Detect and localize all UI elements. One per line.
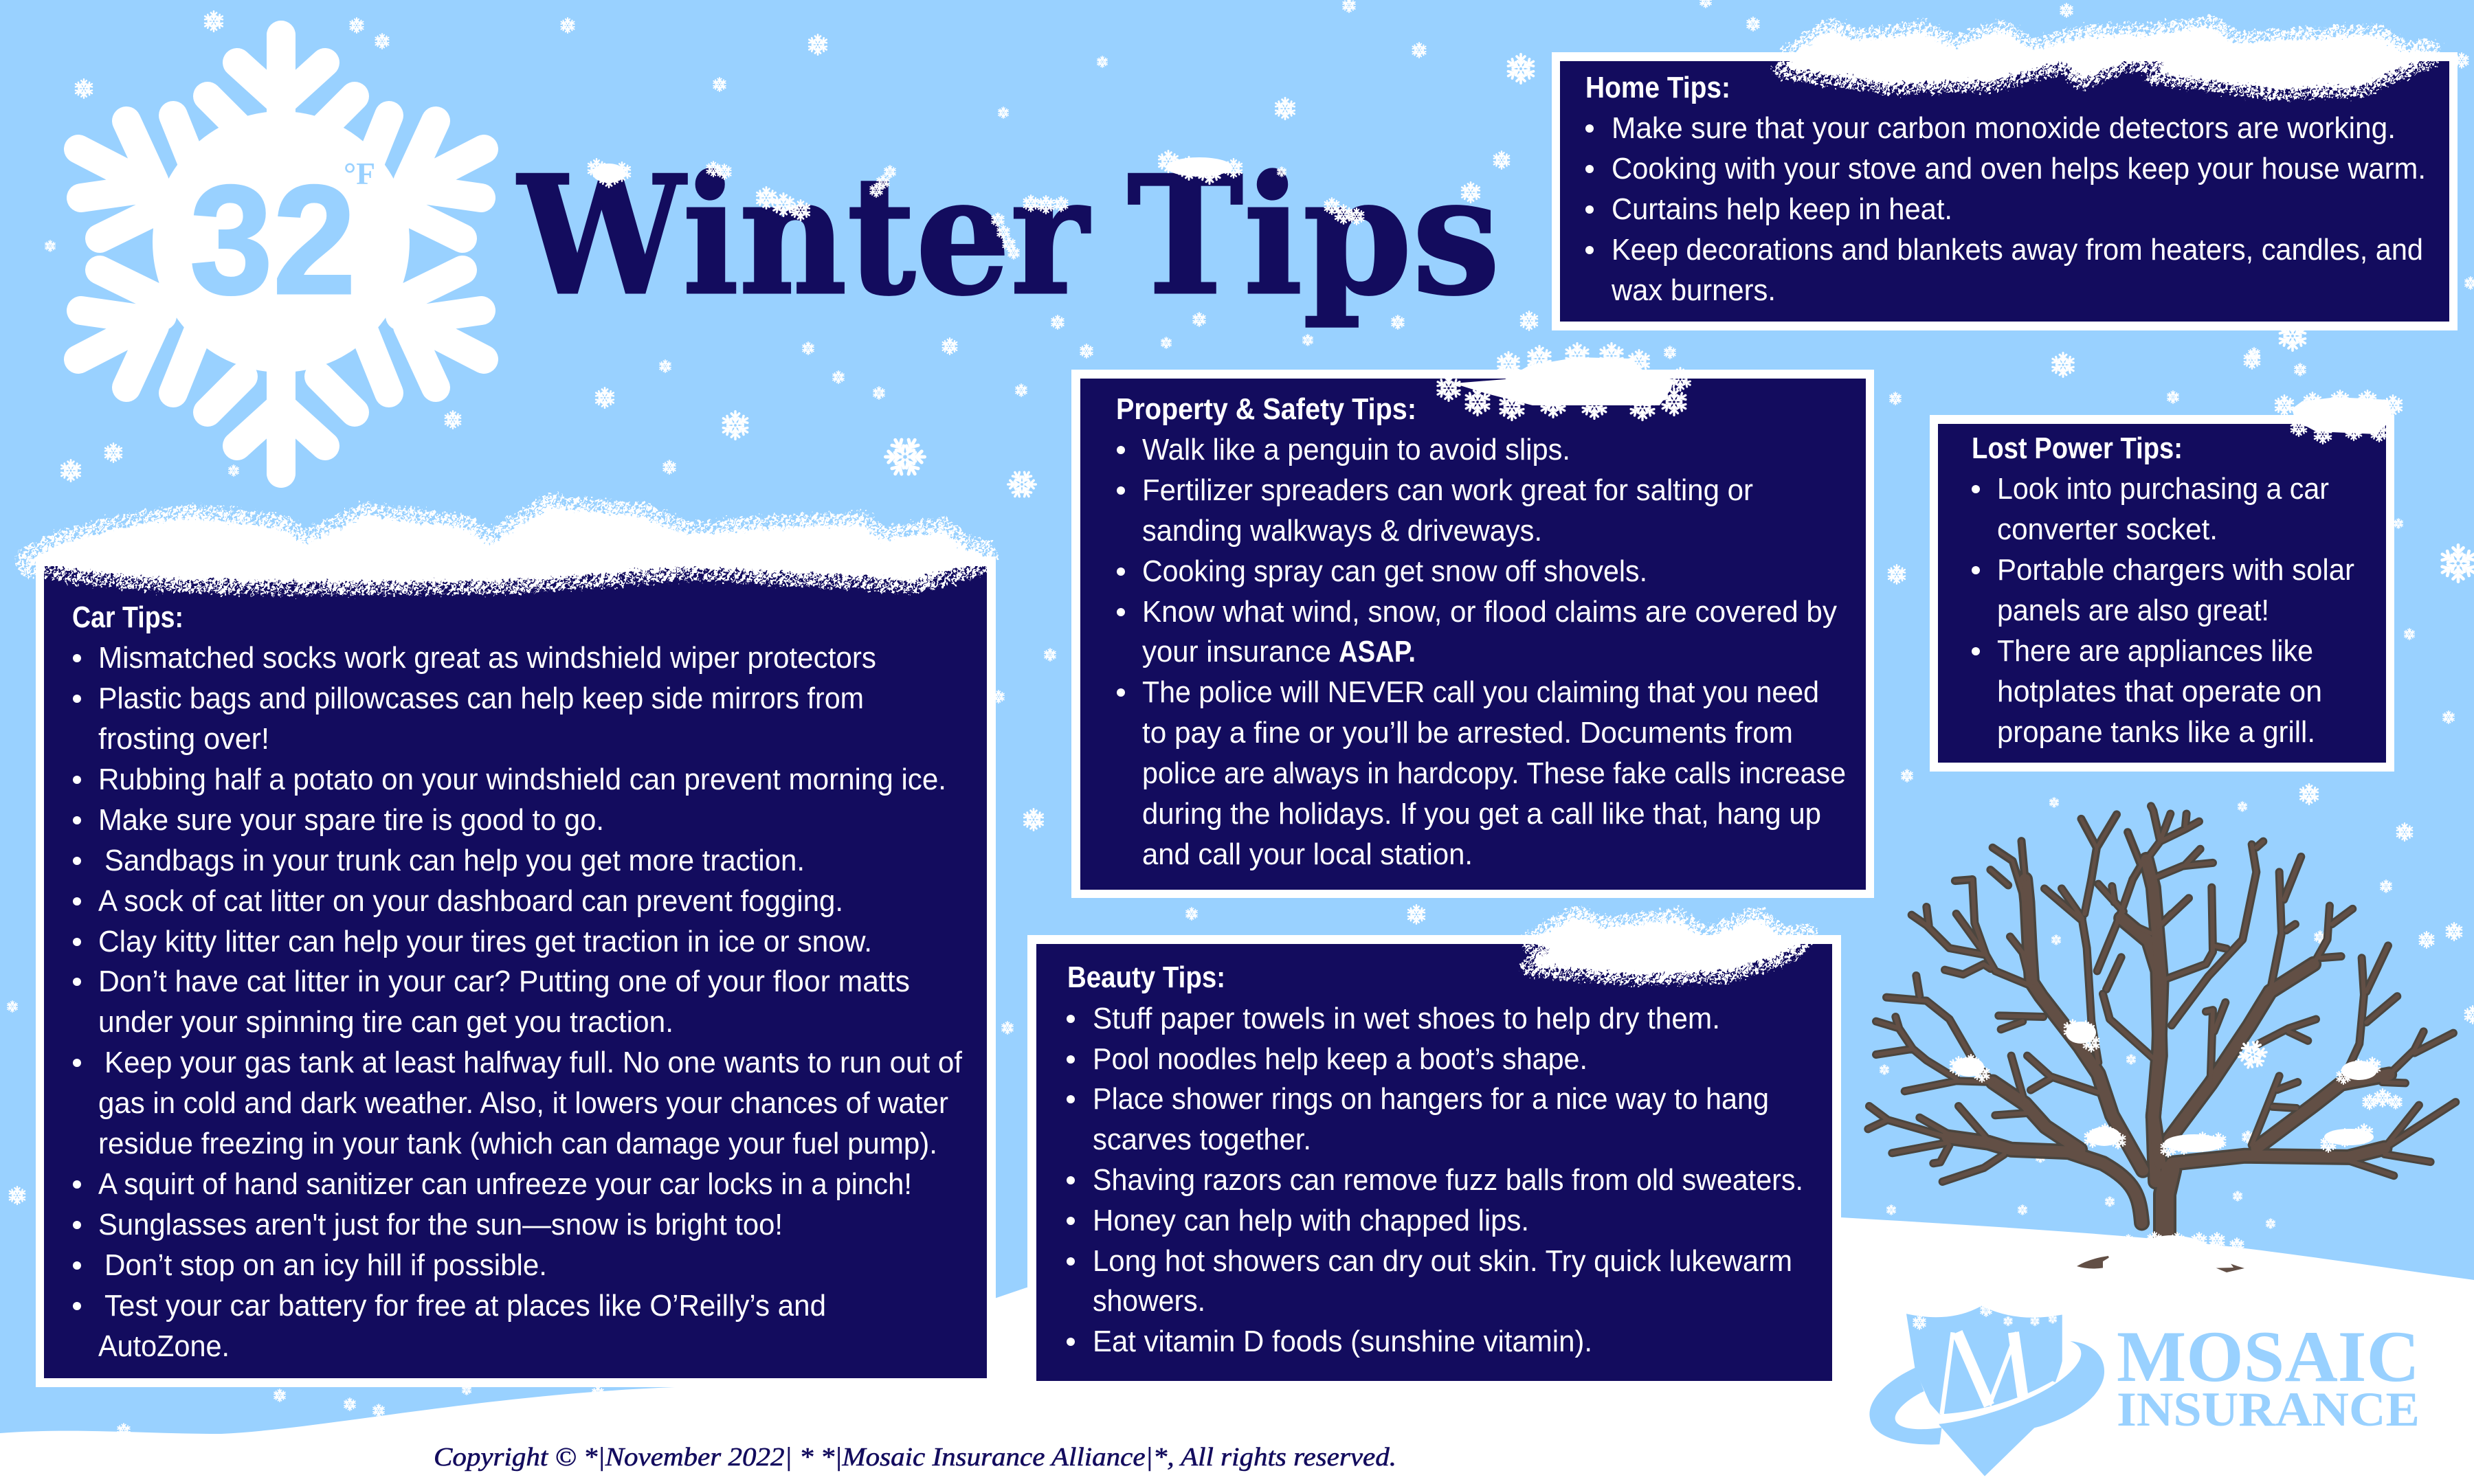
property tips text: Property & Safety Tips: bbox=[1116, 392, 1416, 426]
snow cap: lost power tips panel bbox=[2274, 390, 2403, 444]
copyright footer: Copyright © *|November 2022| * *|Mosaic Insurance Alliance|*, All rights reserved. bbox=[434, 1443, 1396, 1472]
title bbox=[516, 139, 1500, 331]
snow cap: home tips panel bbox=[1784, 26, 2431, 89]
property tips text: police are always in hardcopy. These fake calls increase bbox=[1142, 756, 1846, 790]
beauty tips text: scarves together. bbox=[1093, 1123, 1311, 1156]
beauty tips text: Pool noodles help keep a boot’s shape. bbox=[1093, 1042, 1587, 1076]
property tips text: The police will NEVER call you claiming that you need bbox=[1142, 675, 1819, 709]
home tips text bbox=[1585, 71, 2426, 307]
panel frame bbox=[1027, 935, 1841, 1390]
car tips text: Sunglasses aren't just for the sun—snow is bright too! bbox=[98, 1208, 783, 1241]
property tips text: Know what wind, snow, or flood claims are covered by bbox=[1142, 595, 1837, 629]
car tips text: Rubbing half a potato on your windshield can prevent morning ice. bbox=[98, 763, 946, 796]
title: Tips bbox=[1127, 139, 1500, 331]
home tips text: Keep decorations and blankets away from heaters, candles, and bbox=[1612, 233, 2423, 267]
home tips text: Curtains help keep in heat. bbox=[1612, 192, 1952, 226]
property tips text: sanding walkways & driveways. bbox=[1142, 514, 1542, 548]
car tips text: under your spinning tire can get you traction. bbox=[98, 1005, 673, 1039]
icon: large snowflake thermometer badge: °F bbox=[344, 156, 375, 191]
panel frame bbox=[1930, 415, 2394, 772]
car tips text: Sandbags in your trunk can help you get more traction. bbox=[104, 844, 805, 877]
panel frame bbox=[36, 556, 996, 1387]
car tips text: Keep your gas tank at least halfway full. No one wants to run out of bbox=[104, 1046, 963, 1079]
panel: beauty tips bbox=[1027, 935, 1841, 1390]
panel: car tips bbox=[36, 556, 996, 1387]
property tips text: during the holidays. If you get a call like that, hang up bbox=[1142, 797, 1821, 831]
snow cap: car tips panel bbox=[29, 507, 984, 583]
property tips text: Fertilizer spreaders can work great for salting or bbox=[1142, 473, 1753, 507]
car tips text bbox=[72, 600, 963, 1363]
car tips text: A sock of cat litter on your dashboard can prevent fogging. bbox=[98, 884, 843, 918]
logo snow bbox=[1913, 1304, 2057, 1329]
panel frame bbox=[1552, 52, 2458, 330]
property tips text: to pay a fine or you’ll be arrested. Documents from bbox=[1142, 716, 1793, 750]
car tips text: Mismatched socks work great as windshield wiper protectors bbox=[98, 641, 876, 675]
car tips text: Test your car battery for free at places like O’Reilly’s and bbox=[104, 1289, 826, 1323]
home tips text: Make sure that your carbon monoxide detectors are working. bbox=[1612, 111, 2396, 145]
panel: lost power tips bbox=[1930, 415, 2394, 772]
snow clumps on the tree bbox=[1949, 1020, 2403, 1157]
property tips text: Walk like a penguin to avoid slips. bbox=[1142, 433, 1570, 466]
property tips text bbox=[1116, 392, 1846, 871]
car tips text: residue freezing in your tank (which can damage your fuel pump). bbox=[98, 1127, 937, 1160]
beauty tips text bbox=[1067, 960, 1803, 1358]
lost power tips text: There are appliances like bbox=[1997, 634, 2313, 668]
beauty tips text: Beauty Tips: bbox=[1067, 960, 1225, 994]
snow cap: property tips panel bbox=[1436, 344, 1692, 420]
beauty tips text: Shaving razors can remove fuzz balls from old sweaters. bbox=[1093, 1163, 1803, 1197]
car tips text: AutoZone. bbox=[98, 1329, 230, 1363]
property tips text: your insurance bbox=[1142, 635, 1331, 668]
car tips text: Car Tips: bbox=[72, 600, 183, 634]
home tips text: Cooking with your stove and oven helps keep your house warm. bbox=[1612, 152, 2426, 186]
car tips text: Make sure your spare tire is good to go. bbox=[98, 803, 604, 837]
lost power tips text: panels are also great! bbox=[1997, 594, 2269, 627]
home tips text: wax burners. bbox=[1611, 273, 1776, 307]
snow cap: beauty tips panel bbox=[1531, 917, 1807, 975]
tree outline bbox=[1868, 806, 2455, 1240]
lost power tips text: hotplates that operate on bbox=[1997, 675, 2322, 708]
property tips text: ASAP. bbox=[1339, 635, 1416, 668]
property tips text: Cooking spray can get snow off shovels. bbox=[1142, 554, 1647, 588]
car tips text: A squirt of hand sanitizer can unfreeze your car locks in a pinch! bbox=[98, 1167, 912, 1201]
beauty tips text: Place shower rings on hangers for a nice way to hang bbox=[1093, 1082, 1769, 1116]
logo shield mark bbox=[1869, 1306, 2104, 1476]
logo: Mosaic Insurance bbox=[1869, 1304, 2420, 1476]
property tips text: and call your local station. bbox=[1142, 837, 1473, 871]
tree bark bbox=[1868, 806, 2455, 1240]
title: Winter bbox=[516, 139, 1091, 331]
panel frame bbox=[1071, 370, 1874, 898]
tree roots and snow mound bbox=[2077, 1232, 2244, 1272]
car tips text: Plastic bags and pillowcases can help keep side mirrors from bbox=[98, 682, 864, 715]
logo wordmark: MOSAIC bbox=[2117, 1316, 2420, 1397]
lost power tips text: Portable chargers with solar bbox=[1997, 553, 2354, 587]
car tips text: Don’t stop on an icy hill if possible. bbox=[104, 1248, 547, 1282]
beauty tips text: Honey can help with chapped lips. bbox=[1093, 1204, 1529, 1237]
icon: large snowflake thermometer badge bbox=[78, 35, 484, 473]
icon: large snowflake thermometer badge: 32 bbox=[190, 153, 356, 326]
beauty tips text: showers. bbox=[1093, 1284, 1205, 1318]
home tips text: Home Tips: bbox=[1585, 71, 1730, 104]
lost power tips text: Look into purchasing a car bbox=[1997, 472, 2329, 506]
winter tree bbox=[1868, 806, 2455, 1240]
beauty tips text: Eat vitamin D foods (sunshine vitamin). bbox=[1093, 1325, 1592, 1358]
snow resting on title letters bbox=[587, 150, 1365, 259]
lost power tips text: converter socket. bbox=[1997, 513, 2218, 546]
car tips text: Clay kitty litter can help your tires get traction in ice or snow. bbox=[98, 925, 872, 958]
panel: home tips bbox=[1552, 52, 2458, 330]
car tips text: Don’t have cat litter in your car? Putting one of your floor matts bbox=[98, 965, 910, 998]
panel: property and safety tips bbox=[1071, 370, 1874, 898]
lost power tips text: propane tanks like a grill. bbox=[1997, 715, 2315, 749]
logo: Mosaic Insurance: INSURANCE bbox=[2117, 1383, 2420, 1437]
beauty tips text: Long hot showers can dry out skin. Try quick lukewarm bbox=[1093, 1244, 1792, 1278]
car tips text: frosting over! bbox=[98, 722, 269, 756]
car tips text: gas in cold and dark weather. Also, it lowers your chances of water bbox=[98, 1086, 948, 1120]
snow-covered ground bbox=[0, 1217, 2474, 1484]
beauty tips text: Stuff paper towels in wet shoes to help dry them. bbox=[1093, 1002, 1720, 1035]
lost power tips text bbox=[1972, 431, 2354, 749]
lost power tips text: Lost Power Tips: bbox=[1972, 431, 2183, 465]
